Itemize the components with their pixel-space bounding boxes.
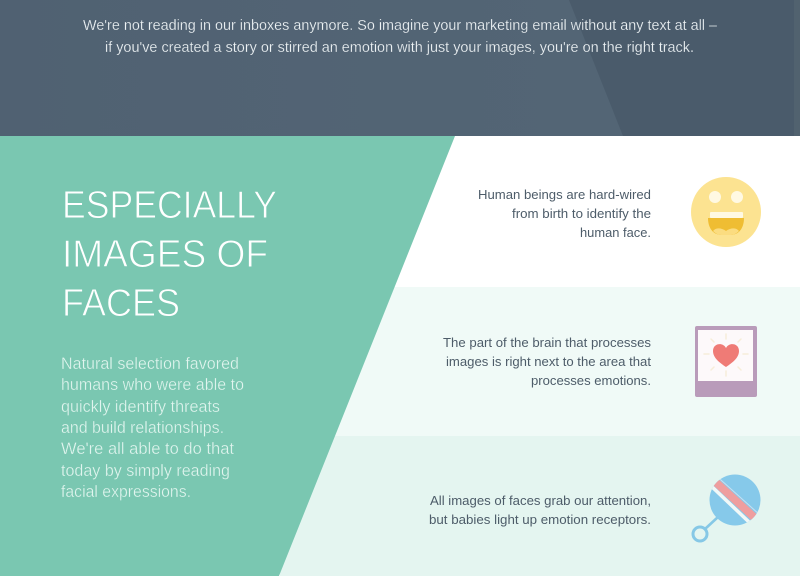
heading: IMAGES OF (62, 233, 268, 276)
text: brain (443, 335, 651, 388)
text: human face: human face. (580, 225, 651, 240)
intro text: We're not reading in our inboxes anymore. So imagine your marketing email without any text at all – (83, 17, 718, 34)
text: babies: All images of faces grab our attention, (430, 493, 651, 508)
body paragraph: and build relationships. (61, 419, 224, 437)
icon: polaroid with heart (695, 326, 757, 397)
text: human face: from birth to identify the (512, 206, 651, 221)
heading: FACES (62, 282, 180, 325)
body paragraph: We're all able to do that (61, 440, 234, 458)
body paragraph: quickly identify threats (61, 398, 220, 416)
body paragraph: Natural selection favored (61, 355, 239, 373)
text: brain: images is right next to the area that (446, 354, 651, 369)
body paragraph: humans who were able to (61, 376, 244, 394)
icon: smiley face (691, 177, 761, 247)
text: brain: The part of the brain that processes (443, 335, 651, 350)
intro text (83, 17, 718, 56)
panel: teal slanted heading panel (0, 136, 455, 576)
body paragraph: today by simply reading (61, 462, 230, 480)
icon: baby rattle (693, 472, 760, 541)
text: babies: but babies light up emotion receptors. (429, 512, 651, 527)
text: human face (478, 187, 651, 240)
body paragraph: facial expressions. (61, 483, 191, 501)
text: brain: processes emotions. (531, 373, 651, 388)
panel: dark intro banner (0, 0, 800, 136)
text: babies (429, 493, 651, 527)
panel: row backgrounds (280, 136, 800, 576)
heading: ESPECIALLY (62, 184, 277, 227)
heading (62, 184, 277, 325)
intro text: if you've created a story or stirred an emotion with just your images, you're on the right track. (105, 39, 694, 56)
body paragraph (61, 355, 244, 501)
text: human face: Human beings are hard-wired (478, 187, 651, 202)
